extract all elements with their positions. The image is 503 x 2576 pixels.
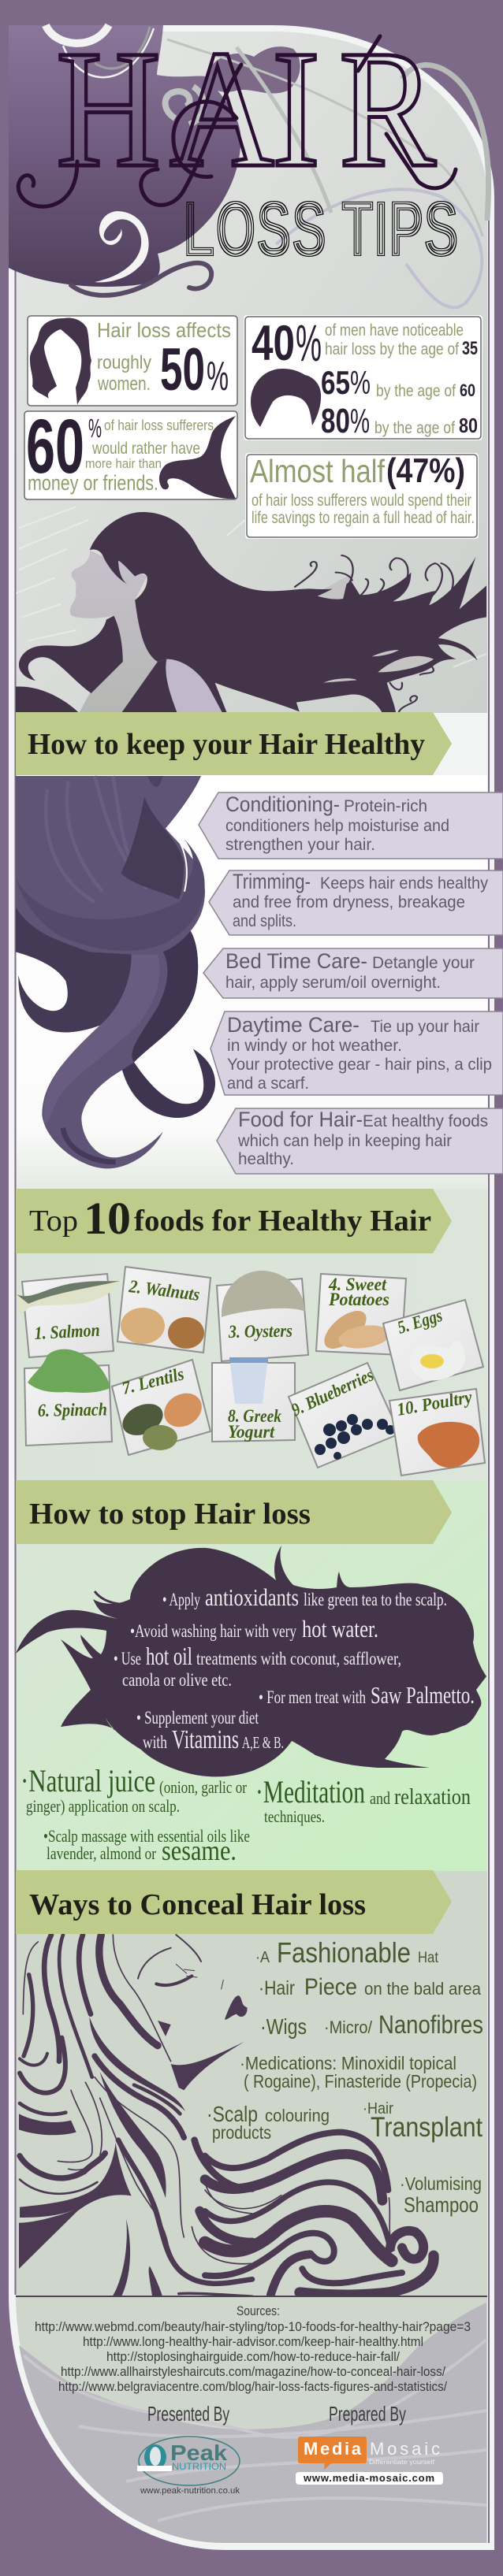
stat box: men's hair loss by age: 65	[321, 364, 350, 401]
conceal tips list: products	[212, 2122, 271, 2143]
arm	[166, 659, 222, 713]
presented by: Peak Nutrition logo: NUTRITION	[172, 2461, 226, 2472]
stat box: 60 percent of sufferers	[24, 403, 237, 499]
section banner: top 10 foods	[16, 1189, 452, 1253]
footer silver wave	[19, 2303, 486, 2543]
food card: spinach	[24, 1349, 112, 1446]
illustration: head silhouette: hot water.	[302, 1615, 378, 1642]
stat box: men's hair loss by age: by the age of	[376, 382, 456, 400]
callout: conditioning	[199, 792, 503, 859]
section banner: stop hair loss: How to stop Hair loss	[29, 1498, 311, 1531]
panel: hair care background	[16, 775, 487, 1190]
tips: meditation	[255, 1774, 471, 1826]
tips: scalp massage: lavender, almond or	[47, 1843, 157, 1863]
callout: food for hair: healthy.	[238, 1150, 294, 1168]
food card: greek yogurt	[212, 1357, 295, 1442]
food card: poultry	[389, 1387, 485, 1475]
callout: daytime care: Tie up your hair	[371, 1018, 479, 1036]
stat box: men's hair loss by age: %	[350, 364, 371, 401]
stat box: men's hair loss by age: by the age of	[374, 419, 455, 437]
stat box: men's hair loss by age: 35	[462, 338, 478, 359]
illustration: head silhouette: Vitamins	[172, 1725, 239, 1754]
illustration: head silhouette	[16, 1546, 486, 1776]
icon: man's hair	[251, 369, 321, 427]
icon: lentils	[117, 1397, 168, 1442]
prepared by: Media Mosaic logo: Differentiate yourself	[369, 2459, 435, 2466]
conceal tips list: ·Hair	[363, 2100, 393, 2118]
food card: greek yogurt: Yogurt	[228, 1422, 275, 1442]
tips: scalp massage: •Scalp massage with essential oils like	[43, 1826, 250, 1846]
callout: daytime care: Your protective gear - hair pins, a clip	[227, 1056, 492, 1074]
food card: lentils	[112, 1360, 211, 1455]
conceal tips list: ·A	[255, 1949, 270, 1966]
food card: salmon	[17, 1274, 120, 1357]
conceal tips list	[207, 1936, 483, 2217]
callout: conditioning: conditioners help moisturise and	[225, 817, 449, 835]
prepared by: Media Mosaic logo: Mosaic	[370, 2439, 440, 2459]
stat box: 50 percent of women: %	[207, 354, 229, 399]
panel: conceal and footer background	[16, 1871, 487, 2543]
callout: daytime care: in windy or hot weather.	[227, 1037, 402, 1055]
stat box: men's hair loss by age: 60	[460, 380, 475, 400]
conceal tips list: Fashionable	[277, 1936, 411, 1969]
icon: egg	[410, 1341, 465, 1381]
tips: meditation: and	[370, 1788, 390, 1808]
stat box: men's hair loss by age: 40	[251, 316, 295, 371]
pale grey gaps in hair	[323, 573, 352, 589]
stat box: 50 percent of women: 50	[160, 336, 205, 403]
conceal tips list: Hat	[418, 1950, 439, 1966]
icon: poultry	[418, 1422, 479, 1468]
conceal tips list: Nanofibres	[378, 2010, 483, 2039]
stat box: 60 percent of sufferers: more hair than	[85, 456, 162, 471]
prepared by: Media Mosaic logo: Media	[304, 2439, 362, 2459]
icon: yogurt pot	[229, 1357, 268, 1404]
sources: http://stoplosinghairguide.com/how-to-reduce-hair-fall/	[106, 2349, 400, 2364]
section banner: stop hair loss	[16, 1480, 452, 1544]
sources: http://www.allhairstyleshaircuts.com/magazine/how-to-conceal-hair-loss/	[61, 2364, 445, 2379]
panel: stop hair loss background	[16, 1481, 487, 1871]
callout: daytime care: and a scarf.	[227, 1075, 309, 1093]
callout: bed time care: Detangle your	[372, 954, 475, 972]
stat box: almost half: Almost half	[250, 453, 386, 489]
flyaway strands	[295, 555, 453, 711]
callout: food for hair: Food for Hair-	[238, 1108, 363, 1131]
stat box: 50 percent of women: roughly	[97, 352, 151, 373]
stat box: 60 percent of sufferers: money or friends.	[28, 471, 158, 495]
food card: blueberries: 9. Blueberries	[289, 1365, 377, 1420]
stat box: 60 percent of sufferers: would rather have	[91, 440, 200, 458]
presented by: Peak Nutrition logo: Peak	[170, 2441, 227, 2465]
illustration: head silhouette: treatments with coconut, safflower,	[196, 1649, 401, 1668]
illustration: purple curled hair	[16, 776, 215, 1168]
panel: foods background	[16, 1190, 487, 1481]
illustration: head silhouette: • For men treat with	[259, 1687, 366, 1707]
illustration: head silhouette: • Use	[114, 1649, 141, 1668]
illustration: head silhouette: like green tea to the scalp.	[304, 1590, 447, 1609]
stat box: men's hair loss by age	[244, 314, 483, 440]
callout: bed time care	[203, 948, 503, 998]
callout: trimming: Keeps hair ends healthy	[320, 874, 488, 893]
top silver panel	[16, 32, 487, 713]
callout: daytime care: Daytime Care-	[227, 1013, 360, 1037]
stat box: 50 percent of women: women.	[97, 373, 151, 395]
conceal tips list: ·Scalp	[207, 2102, 258, 2126]
callout: trimming	[209, 870, 503, 935]
left curl	[19, 616, 123, 693]
sources: http://www.webmd.com/beauty/hair-styling/top-10-foods-for-healthy-hair?page=3	[35, 2319, 471, 2334]
stat box: men's hair loss by age: %	[350, 402, 370, 440]
section banner: top 10 foods: 10	[84, 1193, 131, 1244]
callout: daytime care	[211, 1011, 503, 1095]
icon: sweet potatoes	[318, 1304, 373, 1356]
callout: trimming: Trimming-	[233, 870, 311, 893]
section banner: top 10 foods: Top	[29, 1204, 78, 1238]
food card: salmon: 1. Salmon	[34, 1320, 100, 1343]
illustration: head silhouette: A,E & B.	[242, 1733, 284, 1752]
tips: meditation: relaxation	[394, 1784, 471, 1810]
callout: trimming: and splits.	[233, 912, 296, 930]
food card: eggs	[383, 1300, 483, 1390]
conceal tips list: on the bald area	[364, 1979, 482, 1999]
stat box: men's hair loss by age: of men have noticeable	[325, 321, 464, 340]
food card: spinach: 6. Spinach	[38, 1399, 107, 1420]
food card: lentils: 7. Lentils	[120, 1364, 186, 1398]
section banner: conceal hair loss: Ways to Conceal Hair loss	[29, 1888, 366, 1921]
stat box: almost half	[245, 451, 479, 539]
stat box: 60 percent of sufferers: of hair loss sufferers	[104, 418, 214, 433]
tips: meditation: ·Meditation	[255, 1774, 365, 1810]
icon: woman's hair	[30, 318, 91, 405]
stat box: almost half: (47%)	[386, 451, 465, 490]
section banner: keep hair healthy: How to keep your Hair Healthy	[28, 728, 425, 761]
callout: food for hair	[217, 1108, 503, 1174]
presented by: Peak Nutrition logo: Presented By	[147, 2402, 229, 2426]
tips: meditation: techniques.	[264, 1807, 325, 1826]
food card: sweet potatoes: 4. Sweet	[328, 1275, 387, 1294]
icon: oysters	[222, 1271, 305, 1317]
illustration: head silhouette: with	[143, 1732, 167, 1752]
tips: natural juice: (onion, garlic or	[159, 1777, 248, 1797]
stat box: 50 percent of women	[28, 316, 237, 406]
food card: walnuts: 2. Walnuts	[127, 1276, 201, 1305]
section banner: top 10 foods: foods for Healthy Hair	[134, 1204, 431, 1238]
callout: bed time care: Bed Time Care-	[225, 949, 367, 973]
icon: spinach	[28, 1349, 110, 1393]
section banner: conceal hair loss	[16, 1870, 452, 1934]
conceal tips list: ·Hair	[259, 1977, 295, 1999]
callout: conditioning: Conditioning-	[225, 792, 340, 816]
illustration: woman with flowing hair	[16, 507, 486, 713]
conceal tips list: Transplant	[371, 2112, 483, 2143]
conceal tips list: ·Medications: Minoxidil topical	[240, 2053, 456, 2073]
sources: http://www.long-healthy-hair-advisor.com/keep-hair-healthy.html	[83, 2334, 423, 2349]
food card: sweet potatoes: Potatoes	[328, 1290, 389, 1309]
food card: sweet potatoes	[316, 1274, 406, 1356]
conceal tips list: ·Micro/	[324, 2017, 373, 2037]
sleeve between strap and arm	[121, 659, 177, 713]
illustration: head silhouette: • Supplement your diet	[136, 1708, 259, 1728]
illustration: head silhouette: hot oil	[146, 1642, 192, 1670]
presented by: Peak Nutrition logo	[137, 2402, 240, 2496]
callout: food for hair: Eat healthy foods	[363, 1112, 488, 1130]
conceal tips list: ·Volumising	[400, 2173, 482, 2194]
prepared by: Media Mosaic logo: www.media-mosaic.com	[303, 2472, 434, 2484]
prepared by: Media Mosaic logo	[296, 2402, 443, 2485]
callout: trimming: and free from dryness, breakage	[233, 893, 465, 911]
conceal tips list: ·Wigs	[260, 2014, 307, 2039]
food card: eggs: 5. Eggs	[395, 1305, 445, 1338]
stat box: men's hair loss by age: 80	[459, 414, 478, 437]
right sweep strands	[205, 2132, 388, 2190]
prepared by: Media Mosaic logo: Prepared By	[329, 2402, 406, 2426]
illustration: head silhouette: •Avoid washing hair with very	[130, 1621, 296, 1641]
conceal tips list: Piece	[304, 1974, 357, 2000]
pale slivers	[318, 579, 434, 683]
section banner: keep hair healthy	[16, 712, 452, 775]
sources: http://www.belgraviacentre.com/blog/hair-loss-facts-figures-and-statistics/	[58, 2379, 447, 2394]
illustration: head silhouette: antioxidants	[205, 1583, 299, 1611]
face and neck	[70, 550, 158, 713]
sources: Sources:	[237, 2303, 280, 2318]
stat box: 60 percent of sufferers: %	[88, 414, 102, 443]
footer divider	[16, 2296, 487, 2297]
dark fills	[19, 2143, 132, 2269]
conceal tips list: Shampoo	[404, 2193, 479, 2217]
tips text on silhouette: • Apply	[162, 1590, 200, 1609]
main hair	[90, 512, 486, 713]
presented by: Peak Nutrition logo: www.peak-nutrition.co.uk	[140, 2486, 240, 2496]
callout: conditioning: strengthen your hair.	[225, 836, 375, 854]
brow eye nose	[138, 1948, 171, 1979]
icon: salmon	[17, 1281, 120, 1316]
stat box: men's hair loss by age: %	[296, 314, 322, 372]
tips: natural juice: ·Natural juice	[20, 1763, 155, 1798]
food card: walnuts	[117, 1267, 211, 1353]
stat box: 50 percent of women: Hair loss affects	[97, 318, 231, 342]
illustration: woman line art	[19, 1935, 434, 2298]
stat box: 60 percent of sufferers: 60	[26, 403, 84, 489]
callout: food for hair: which can help in keeping hair	[237, 1132, 452, 1150]
food card: oysters: 3. Oysters	[228, 1321, 292, 1342]
tips: scalp massage: sesame.	[162, 1835, 237, 1866]
tips: natural juice	[20, 1763, 248, 1816]
stat box: men's hair loss by age: hair loss by the age of	[325, 340, 459, 358]
food card: greek yogurt: 8. Greek	[228, 1406, 281, 1426]
silver streaks	[16, 507, 486, 703]
stat box: men's hair loss by age: 80	[321, 402, 350, 440]
food card: poultry: 10. Poultry	[396, 1387, 474, 1420]
tips: scalp massage	[43, 1826, 250, 1866]
tips: natural juice: ginger) application on scalp.	[26, 1796, 180, 1816]
icon: blueberries	[315, 1414, 395, 1460]
icon: flowing hair	[159, 416, 236, 499]
left shoulder	[16, 686, 79, 713]
food card: blueberries	[289, 1363, 400, 1468]
conceal tips list: colouring	[265, 2106, 330, 2125]
callout: conditioning: Protein-rich	[344, 797, 427, 815]
icon: walnuts	[121, 1308, 165, 1344]
food card: oysters	[217, 1271, 308, 1361]
callout: bed time care: hair, apply serum/oil overnight.	[225, 974, 441, 992]
strands	[44, 1935, 59, 2062]
illustration: head silhouette: canola or olive etc.	[122, 1670, 232, 1690]
decorative swirls behind title	[9, 25, 489, 307]
sources	[35, 2303, 471, 2394]
title: HAIR: HAIR	[56, 16, 436, 202]
